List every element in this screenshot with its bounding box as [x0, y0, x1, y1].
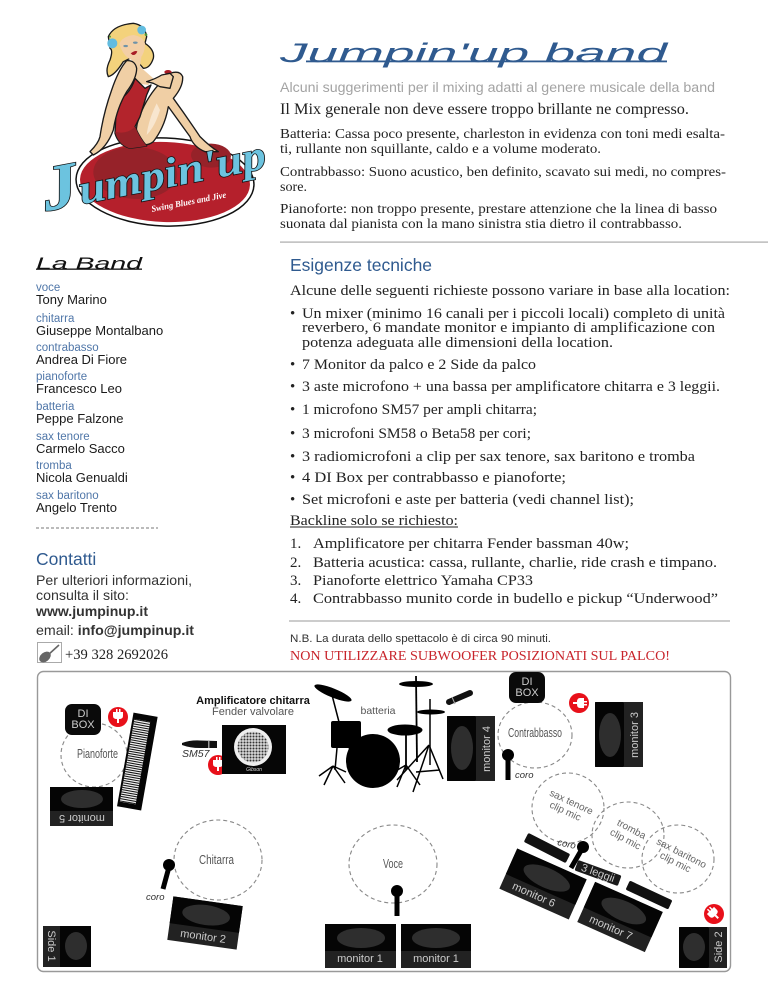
mixing notes text block: sore. — [280, 180, 307, 195]
monitor 1 right — [401, 924, 471, 968]
DI box right: DI — [522, 676, 532, 688]
technical requirements text block: 4 DI Box per contrabbasso e pianoforte; — [302, 470, 566, 486]
band member list: Francesco Leo — [36, 381, 122, 396]
vocal mic: horns — [556, 837, 589, 868]
DI box right — [509, 672, 545, 703]
technical requirements text block: • — [290, 306, 295, 322]
musician labels: clip mic — [658, 850, 692, 875]
guitar amplifier: Gibson — [246, 767, 262, 773]
drum label: batteria — [360, 705, 396, 717]
mixing notes text block — [280, 101, 726, 232]
DI box right: BOX — [515, 687, 539, 699]
drum kit — [313, 676, 445, 792]
monitor 6: monitor 6 — [510, 880, 557, 910]
mixing notes text block: ti, rullante non squillante, caldo e a volume moderato. — [280, 142, 601, 157]
technical requirements text block: • — [290, 357, 295, 373]
guitar amp label: Amplificatore chitarra — [196, 695, 311, 707]
side 1: Side 1 — [45, 930, 57, 962]
panel: stage plan — [38, 672, 730, 972]
technical requirements text block: Backline solo se richiesto: — [290, 513, 458, 529]
technical requirements text block: 1. — [290, 536, 301, 552]
subwoofer warning: NON UTILIZZARE SUBWOOFER POSIZIONATI SUL PALCO! — [290, 648, 670, 663]
band member list: voce — [36, 282, 60, 294]
musician labels: Voce — [383, 857, 403, 871]
heading: La Band — [36, 255, 143, 273]
band member list: pianoforte — [36, 371, 87, 383]
musician labels: sax tenore — [548, 788, 595, 818]
band member list: Andrea Di Fiore — [36, 352, 127, 367]
musician labels: tromba — [615, 818, 648, 842]
monitor 5: monitor 5 — [59, 812, 105, 824]
technical requirements text block: reverbero, 6 mandate monitor e impianto di amplificazione con — [302, 320, 716, 336]
guitar amp label: Fender valvolare — [212, 706, 294, 718]
technical requirements text block: 3 microfoni SM58 o Beta58 per cori; — [302, 426, 531, 442]
mixing notes text block: Batteria: Cassa poco presente, charleston in evidenza con toni medi esalta- — [280, 127, 725, 142]
band member list: Peppe Falzone — [36, 411, 123, 426]
mixing notes text block: suonata dal pianista con la mano sinistra stia dietro il contrabbasso. — [280, 217, 682, 232]
contact details: www.jumpinup.it — [35, 603, 148, 619]
subtitle: Alcuni suggerimenti per il mixing adatti al genere musicale della band — [280, 80, 715, 95]
musician labels — [77, 726, 708, 875]
monitor 7: monitor 7 — [587, 913, 634, 943]
musician labels: Pianoforte — [77, 747, 118, 761]
vocal mic: guitar: coro — [146, 892, 164, 903]
side 1 — [43, 926, 91, 967]
duration note: N.B. La durata dello spettacolo è di circa 90 minuti. — [290, 633, 551, 645]
technical requirements text block: 4. — [290, 591, 301, 607]
musician labels: Chitarra — [199, 853, 234, 867]
musician labels: Contrabbasso — [508, 726, 562, 740]
technical requirements text block: 3. — [290, 573, 301, 589]
monitor 7 — [577, 882, 663, 952]
DI box left — [65, 704, 101, 735]
technical requirements text block: 7 Monitor da palco e 2 Side da palco — [302, 357, 536, 373]
contact details: Per ulteriori informazioni, — [36, 572, 192, 588]
mixing notes text block: Il Mix generale non deve essere troppo brillante ne compresso. — [280, 101, 689, 118]
contact details: email: info@jumpinup.it — [36, 622, 194, 638]
heading: La Band: La Band — [36, 255, 143, 273]
band member list: sax baritono — [36, 490, 99, 502]
technical requirements text block: Pianoforte elettrico Yamaha CP33 — [313, 573, 533, 589]
monitor 3 — [595, 702, 643, 767]
technical requirements text block: • — [290, 470, 295, 486]
icon: keyboard — [117, 713, 158, 810]
monitor 4 — [447, 716, 495, 781]
technical requirements text block — [290, 283, 730, 607]
SM57 microphone: SM57 — [182, 748, 211, 760]
icon: guitar — [37, 642, 62, 665]
music stand 1 — [524, 833, 570, 863]
monitor 3: monitor 3 — [629, 712, 641, 758]
technical requirements text block: 3 aste microfono + una bassa per amplificatore chitarra e 3 leggii. — [302, 379, 720, 395]
vocal mic: bass: coro — [515, 770, 533, 781]
contact details — [35, 572, 194, 638]
monitor 1 left: monitor 1 — [337, 953, 383, 965]
icon: drum microphone — [449, 693, 470, 704]
technical requirements text block: Alcune delle seguenti richieste possono variare in base alla location: — [290, 283, 730, 299]
band member list: chitarra — [36, 313, 75, 325]
vocal mic: horns: coro — [556, 837, 577, 852]
technical requirements text block: 1 microfono SM57 per ampli chitarra; — [302, 402, 537, 418]
music stands label: 3 leggii — [579, 862, 616, 885]
title: Jumpin'up band — [278, 38, 669, 68]
monitor 2 — [167, 896, 243, 950]
monitor 1 left — [325, 924, 396, 968]
band member list: Giuseppe Montalbano — [36, 323, 163, 338]
band member list: Nicola Genualdi — [36, 470, 128, 485]
technical requirements text block: • — [290, 449, 295, 465]
pin-up figure — [90, 23, 218, 155]
icon: power plug piano — [108, 707, 128, 727]
music stands label — [574, 860, 621, 887]
technical requirements text block: Set microfoni e aste per batteria (vedi channel list); — [302, 492, 634, 508]
SM57 microphone — [182, 740, 217, 760]
contact details: consulta il sito: — [36, 587, 129, 603]
band member list: Tony Marino — [36, 292, 107, 307]
band member list: tromba — [36, 460, 72, 472]
icon: power plug bass — [569, 693, 589, 713]
stage outline — [38, 672, 730, 972]
band member list: batteria — [36, 401, 75, 413]
icon: power plug amp — [208, 755, 228, 775]
technical requirements text block: Batteria acustica: cassa, rullante, charlie, ride crash e timpano. — [313, 555, 717, 571]
DI box left: DI — [78, 708, 88, 720]
musician labels: sax baritono — [654, 837, 708, 871]
logo wordmark: Jumpin'up — [34, 112, 271, 225]
side 2: Side 2 — [713, 931, 725, 963]
guitar amp label — [196, 695, 311, 718]
technical requirements text block: • — [290, 379, 295, 395]
band member list — [36, 282, 163, 515]
logo: Jumpin'up pin-up girl on red oval — [34, 23, 271, 229]
technical requirements text block: 3 radiomicrofoni a clip per sax tenore, sax baritono e tromba — [302, 449, 695, 465]
music stand 3 — [626, 881, 672, 909]
band member list: Carmelo Sacco — [36, 441, 125, 456]
technical requirements text block: • — [290, 492, 295, 508]
band member list: sax tenore — [36, 431, 90, 443]
logo tagline: Swing Blues and Jive — [150, 190, 227, 214]
heading: Contatti: Contatti — [36, 549, 96, 569]
technical requirements text block: • — [290, 402, 295, 418]
heading: Esigenze tecniche: Esigenze tecniche — [290, 255, 432, 275]
vocal mic: lead — [391, 885, 403, 916]
band member list: contrabasso — [36, 342, 99, 354]
musician position circles — [61, 702, 714, 903]
technical requirements text block: Amplificatore per chitarra Fender bassman 40w; — [313, 536, 629, 552]
monitor 6 — [499, 848, 587, 920]
technical requirements text block: Contrabbasso munito corde in budello e pickup “Underwood” — [313, 591, 718, 607]
band member list: Angelo Trento — [36, 500, 117, 515]
mixing notes text block: Pianoforte: non troppo presente, prestare attenzione che la linea di basso — [280, 202, 717, 217]
monitor 4: monitor 4 — [481, 726, 493, 772]
side 2 — [679, 927, 727, 968]
technical requirements text block: potenza adeguata alle dimensioni della location. — [302, 335, 613, 351]
vocal mic: guitar — [146, 859, 175, 903]
vocal mic: bass — [502, 749, 533, 781]
technical requirements text block: Un mixer (minimo 16 canali per i piccoli locali) completo di unità — [302, 306, 725, 322]
phone number: +39 328 2692026 — [65, 647, 168, 663]
musician labels: clip mic — [548, 800, 582, 824]
icon: power plug side — [704, 904, 724, 924]
technical requirements text block: 2. — [290, 555, 301, 571]
musician labels: clip mic — [608, 827, 642, 852]
monitor 2: monitor 2 — [180, 928, 227, 946]
monitor 1 right: monitor 1 — [413, 953, 459, 965]
guitar amplifier — [222, 725, 286, 774]
technical requirements text block: • — [290, 426, 295, 442]
monitor 5 — [50, 787, 113, 826]
mixing notes text block: Contrabbasso: Suono acustico, ben definito, scavato sui medi, no compres- — [280, 165, 726, 180]
logo oval — [75, 135, 255, 229]
DI box left: BOX — [71, 719, 95, 731]
